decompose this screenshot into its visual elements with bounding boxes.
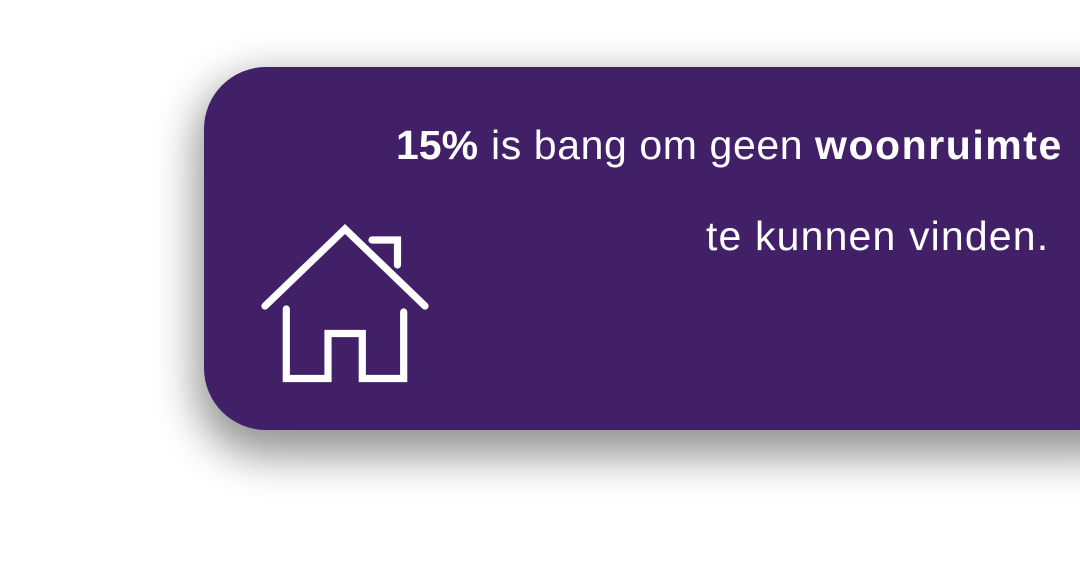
icon part: roof [265, 229, 425, 306]
text: first line: is bang om geen [491, 122, 803, 168]
text: first line: 15% [396, 122, 478, 168]
text: first line [396, 122, 1063, 168]
icon part: chimney [372, 240, 398, 265]
icon part: walls and door [286, 309, 404, 378]
text: first line: woonruimte [815, 122, 1063, 168]
icon: house [261, 224, 429, 382]
text: second line: te kunnen vinden. [706, 213, 1049, 259]
panel: purple card [204, 67, 1080, 430]
